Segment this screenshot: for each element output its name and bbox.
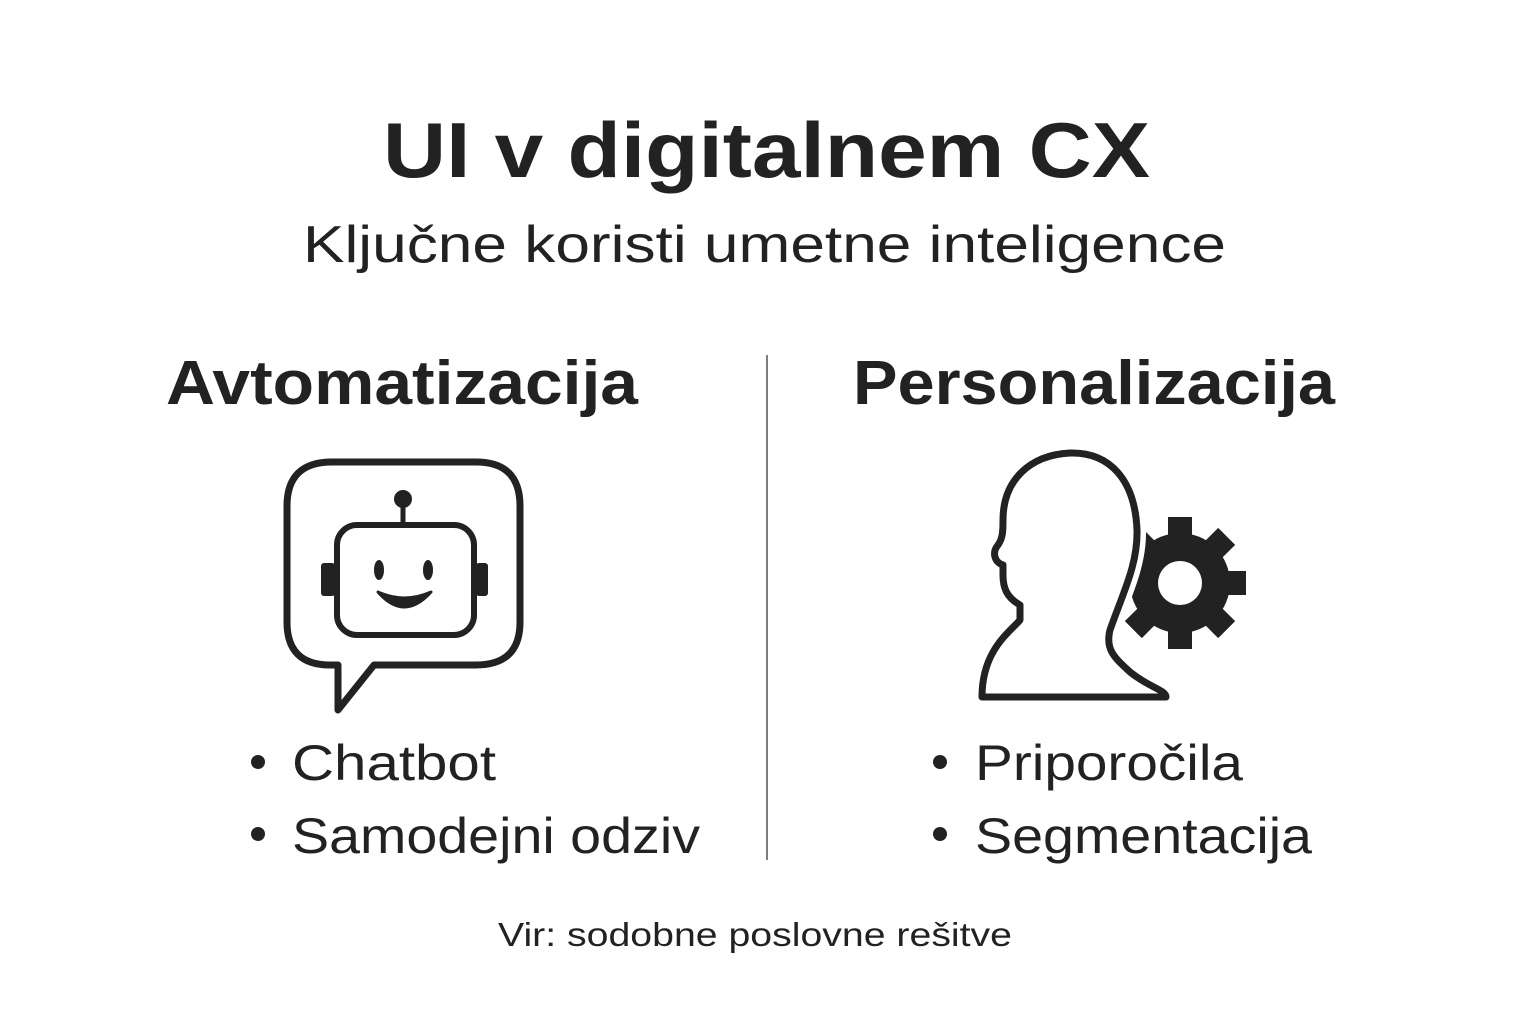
bullets: right <box>933 735 1312 864</box>
heading: Personalizacija: Personalizacija <box>853 349 1336 418</box>
bullets: right: Priporočila <box>975 735 1243 791</box>
bullets: left: Chatbot <box>292 735 496 791</box>
icon: person with gear <box>982 453 1246 697</box>
heading: Avtomatizacija: Avtomatizacija <box>166 349 639 418</box>
footer source: Vir: sodobne poslovne rešitve <box>498 916 1012 953</box>
subtitle: Ključne koristi umetne inteligence <box>303 216 1226 274</box>
bullets: right: Segmentacija <box>975 808 1312 864</box>
bullets: left: Samodejni odziv <box>292 808 700 864</box>
icon: chatbot bubble <box>287 462 520 710</box>
bullets: left <box>251 735 700 864</box>
title: UI v digitalnem CX <box>383 106 1150 194</box>
